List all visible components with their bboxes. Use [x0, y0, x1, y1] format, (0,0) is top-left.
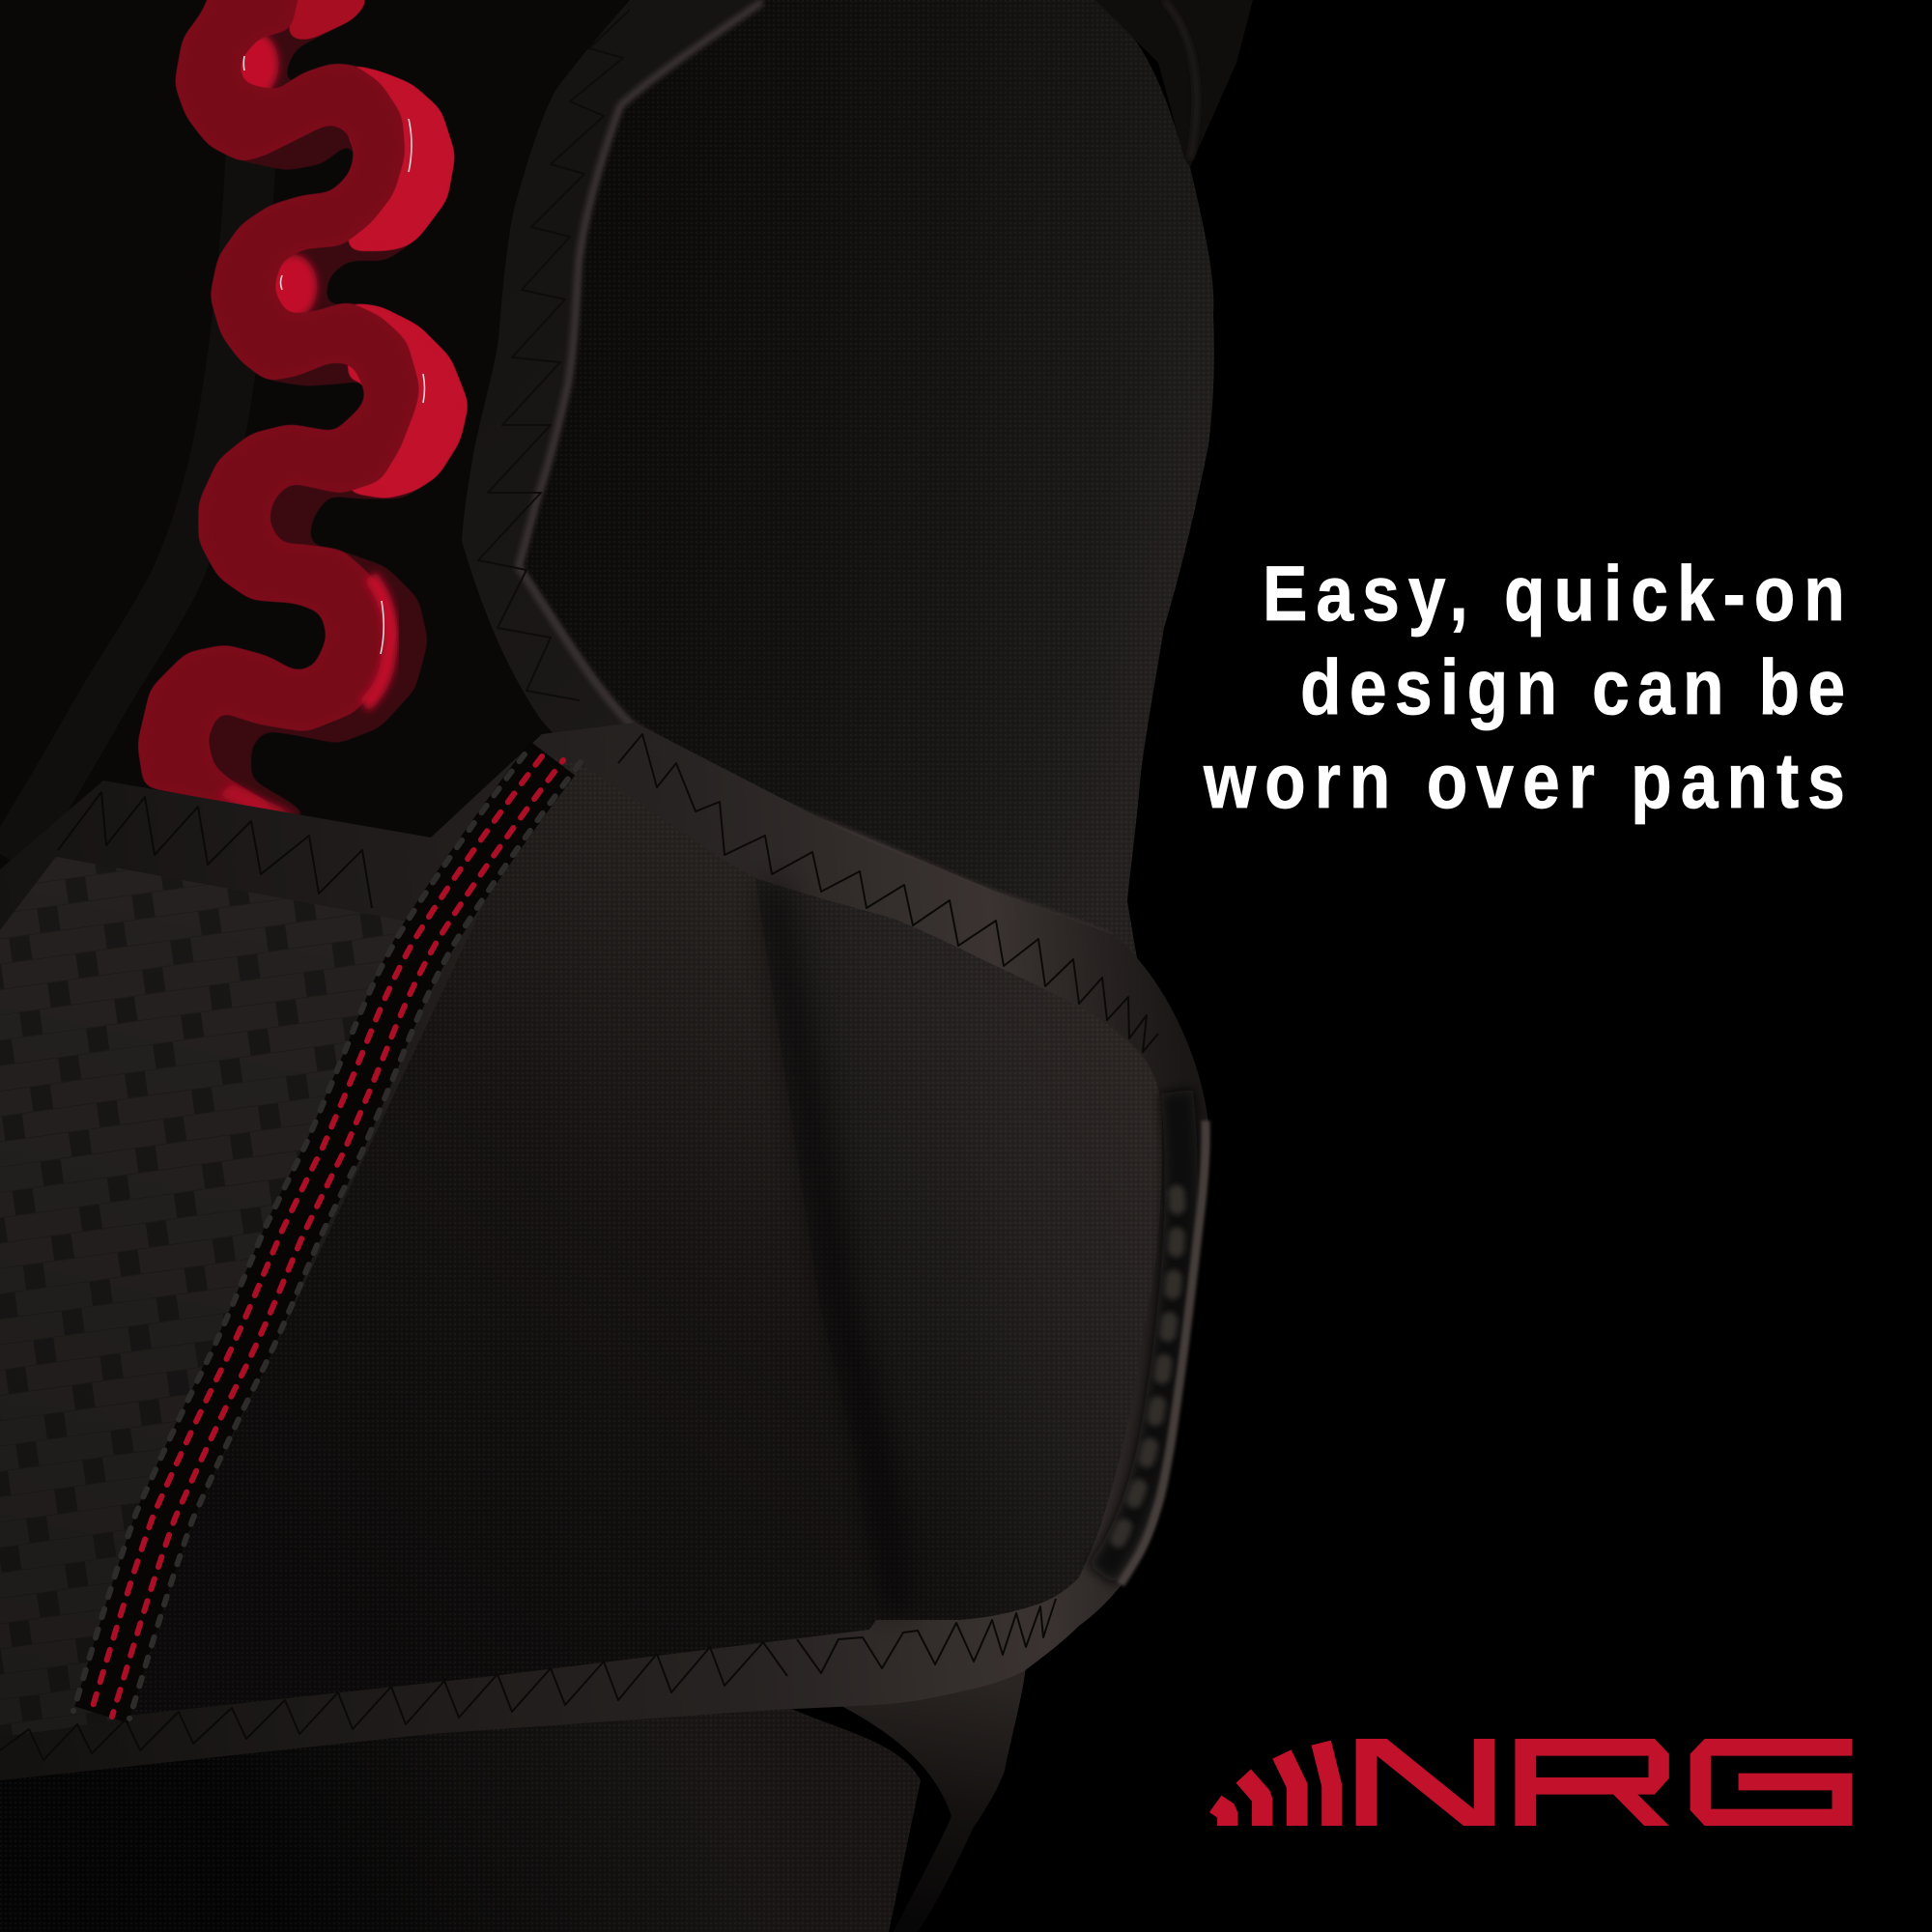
headline text: worn over pants	[1203, 738, 1845, 825]
photo: side fold of brace	[10, 116, 253, 860]
spring: lit inner blobs	[234, 32, 317, 319]
headline text	[1203, 551, 1845, 825]
spring: full silhouette and dark side wall	[138, 0, 469, 824]
photo: right pad panel	[755, 878, 1162, 1620]
logo: signal bars icon	[1209, 1741, 1342, 1826]
photo: middle pad panel	[101, 758, 876, 1715]
photo: upper binding	[462, 0, 1140, 1005]
photo: zigzag stitching	[0, 10, 1158, 1760]
photo: right binding rim and stitch blobs	[1101, 1092, 1206, 1584]
photo: carbon fibre panel	[0, 857, 435, 1737]
spring: lit rim on lower bulge	[364, 577, 390, 705]
photo: binding highlight	[519, 2, 1110, 937]
photo: top fold band	[1095, 0, 1253, 167]
photo: knee pad binding	[0, 723, 1209, 1780]
seam: left grey stitch	[73, 754, 525, 1711]
spring: front face	[138, 0, 418, 814]
logo: letter R	[1515, 1739, 1669, 1826]
logo: letter G	[1690, 1739, 1852, 1826]
spring: specular highlights	[243, 56, 425, 654]
photo: seam band with red stitching	[73, 754, 581, 1719]
spring: lit walls	[287, 0, 480, 499]
photo: upper-left dark fabric	[0, 0, 773, 966]
seam: left red stitch	[91, 756, 542, 1713]
headline text: design can be	[1300, 644, 1845, 731]
red spring zigzag	[138, 0, 480, 824]
photo: pad crease shadow	[773, 884, 898, 1613]
photo: binding tail	[821, 1666, 1026, 1932]
spring: lit bottom tip	[219, 784, 297, 814]
seam: right red stitch	[112, 760, 563, 1717]
logo: letter N	[1356, 1739, 1494, 1826]
headline text: Easy, quick-on	[1263, 551, 1845, 638]
seam: right grey stitch	[129, 762, 581, 1719]
photo: upper leg sleeve	[523, 0, 1214, 976]
NRG logo	[1209, 1739, 1852, 1826]
photo: lower leg	[0, 1700, 921, 1932]
